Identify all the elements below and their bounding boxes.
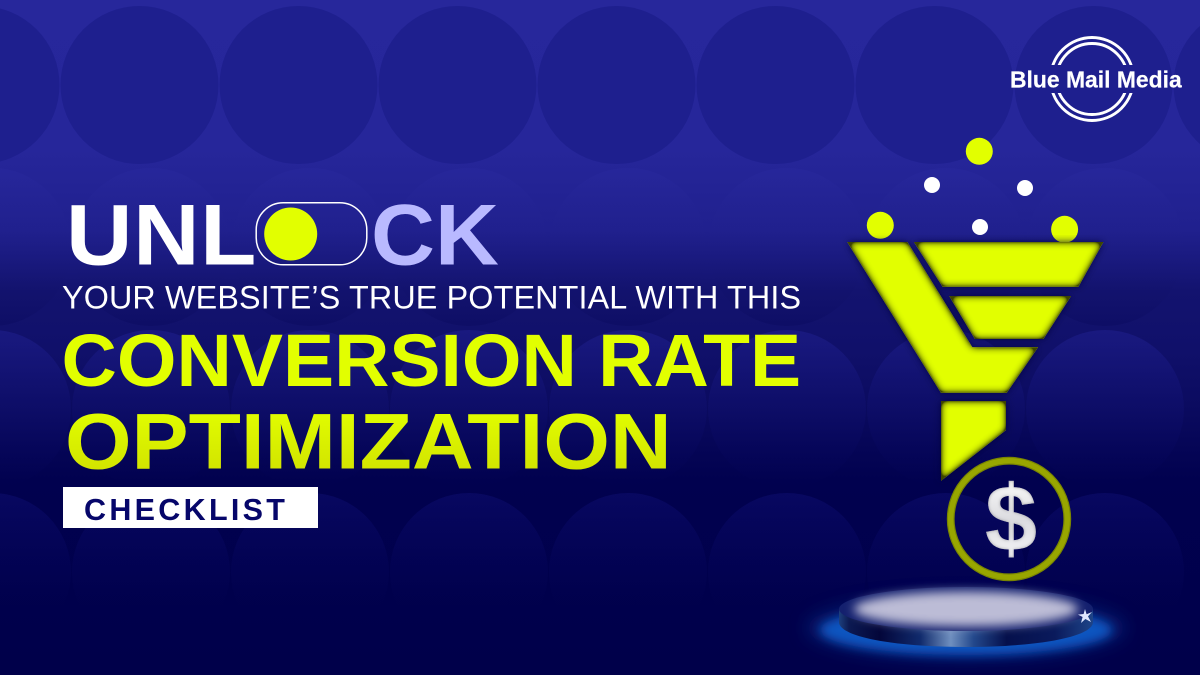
checklist badge	[63, 487, 318, 528]
falling balls	[867, 138, 1078, 243]
logo: Blue Mail Media: Blue Mail Media	[1010, 66, 1182, 92]
headline: UNLOCK with toggle	[66, 186, 499, 283]
logo: Blue Mail Media	[1010, 38, 1182, 120]
headline: UNLOCK with toggle: CK	[371, 188, 499, 283]
icon: dollar coin	[947, 457, 1071, 581]
title line: optimization: OPTIMIZATION	[65, 398, 672, 486]
platform outer glow	[806, 596, 1126, 660]
headline: UNLOCK with toggle: UNL	[66, 186, 257, 283]
platform light	[854, 592, 1078, 626]
platform top	[839, 587, 1093, 631]
podium platform	[806, 587, 1126, 660]
title line: conversion rate: CONVERSION RATE	[62, 319, 801, 402]
icon: funnel	[847, 242, 1103, 481]
icon: dollar coin: $	[985, 466, 1037, 570]
platform side	[839, 609, 1093, 647]
checklist badge: CHECKLIST	[84, 493, 288, 527]
subheading: YOUR WEBSITE’S TRUE POTENTIAL WITH THIS	[62, 280, 801, 316]
icon: toggle switch as letter O	[256, 203, 367, 265]
platform glow	[820, 605, 1112, 655]
platform sparkle	[1078, 609, 1092, 623]
